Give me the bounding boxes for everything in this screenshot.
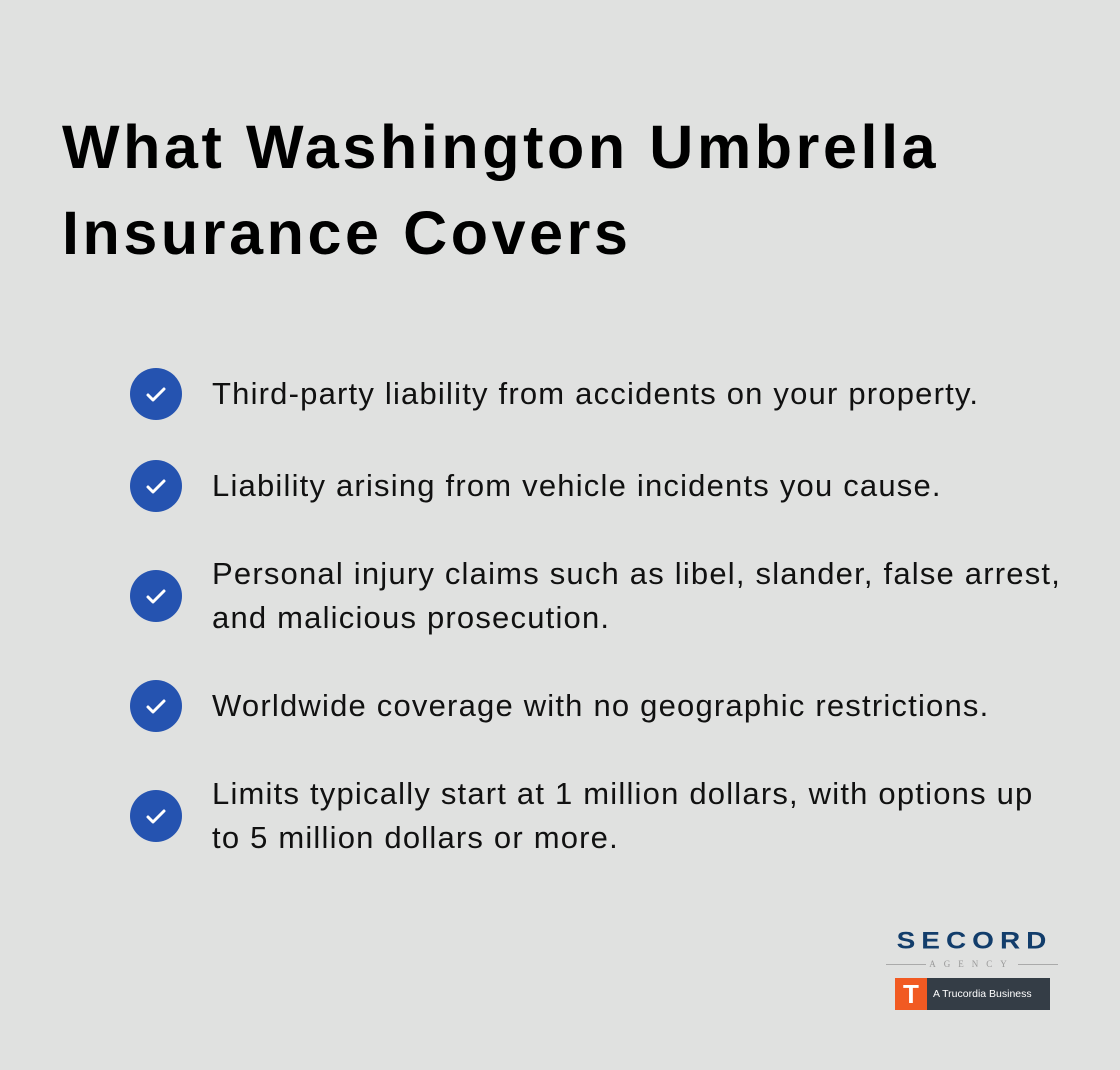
item 2 [130,460,942,512]
text: Limits typically start at 1 million dollars, with options up [212,776,1033,811]
title: What Washington Umbrella [62,113,939,181]
item 5 [130,776,1033,855]
text: Liability arising from vehicle incidents you cause. [212,468,942,503]
item 3 [130,556,1061,635]
icon: check [130,680,182,732]
text: to 5 million dollars or more. [212,820,619,855]
title [62,113,939,267]
item 4 [130,680,989,732]
text: and malicious prosecution. [212,600,610,635]
text: Worldwide coverage with no geographic restrictions. [212,688,989,723]
icon: check [130,790,182,842]
logo: SECORD AGENCY: AGENCY [929,959,1015,969]
item 1 [130,368,979,420]
title: Insurance Covers [62,199,632,267]
logo: SECORD AGENCY: SECORD [897,927,1052,954]
logo: Trucordia badge: A Trucordia Business [933,988,1032,1000]
logo: Trucordia badge [895,978,1050,1010]
logo: Trucordia badge: T [903,979,919,1009]
logo: SECORD AGENCY [886,927,1058,969]
icon: check [130,368,182,420]
logo [886,927,1058,1010]
text [212,776,1033,855]
icon: check [130,460,182,512]
icon: check [130,570,182,622]
text: Personal injury claims such as libel, slander, false arrest, [212,556,1061,591]
text: Third-party liability from accidents on your property. [212,376,979,411]
text [212,556,1061,635]
